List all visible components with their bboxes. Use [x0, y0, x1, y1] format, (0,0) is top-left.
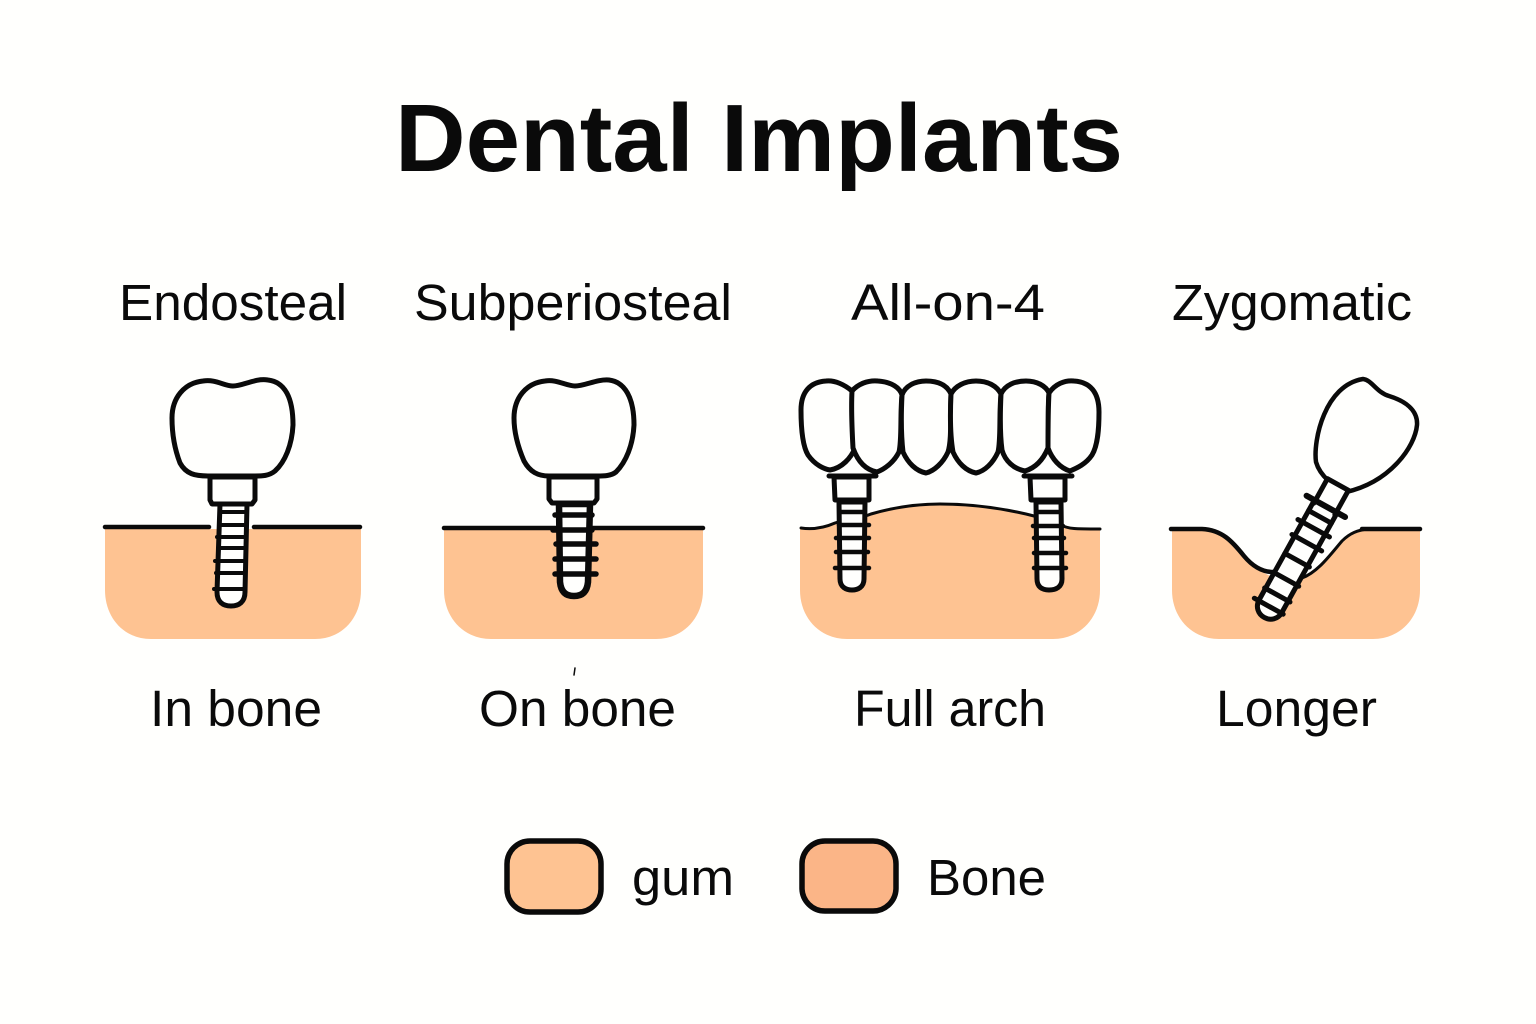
- gum block: [444, 530, 703, 639]
- panel: Subperiosteal: [414, 274, 732, 639]
- stray mark: [574, 668, 575, 675]
- gum line right: [1302, 529, 1368, 578]
- caption: Longer: Longer: [1216, 680, 1377, 737]
- screw: [553, 504, 596, 596]
- panel: Zygomatic: [1171, 274, 1420, 639]
- panel: All-on-4: [800, 274, 1100, 639]
- crown: [1316, 379, 1417, 492]
- panel: Endosteal: [105, 274, 361, 639]
- title: Dental Implants: [395, 85, 1123, 192]
- abutment: [210, 477, 255, 504]
- crown: [172, 380, 293, 476]
- right screw: [1033, 502, 1066, 590]
- right abutment: [1024, 476, 1072, 500]
- caption: In bone: In bone: [150, 680, 322, 737]
- heading: All-on-4: All-on-4: [851, 274, 1045, 331]
- gum block with raised ridge: [800, 504, 1100, 639]
- caption: On bone: On bone: [479, 680, 676, 737]
- legend swatch: gum: [507, 841, 601, 912]
- gum block: [105, 529, 361, 639]
- heading: Subperiosteal: Subperiosteal: [414, 274, 732, 331]
- legend label: Bone: Bone: [927, 849, 1046, 906]
- gum line: [444, 526, 703, 530]
- heading: Zygomatic: Zygomatic: [1172, 274, 1412, 331]
- caption: Full arch: Full arch: [854, 680, 1046, 737]
- angled implant: [1245, 474, 1357, 628]
- crown: [514, 380, 634, 476]
- legend: [507, 841, 1046, 912]
- heading: Endosteal: Endosteal: [119, 274, 347, 331]
- gum line: [105, 525, 360, 529]
- abutment: [549, 477, 597, 503]
- bridge of six crowns: [801, 381, 1099, 473]
- screw: [214, 504, 247, 606]
- gum block with socket: [1172, 530, 1420, 639]
- left screw: [835, 502, 869, 590]
- legend label: gum: gum: [632, 849, 734, 906]
- gum line: [801, 504, 1100, 529]
- legend swatch: bone: [802, 841, 896, 911]
- left abutment: [829, 476, 876, 500]
- gum line left: [1171, 529, 1273, 572]
